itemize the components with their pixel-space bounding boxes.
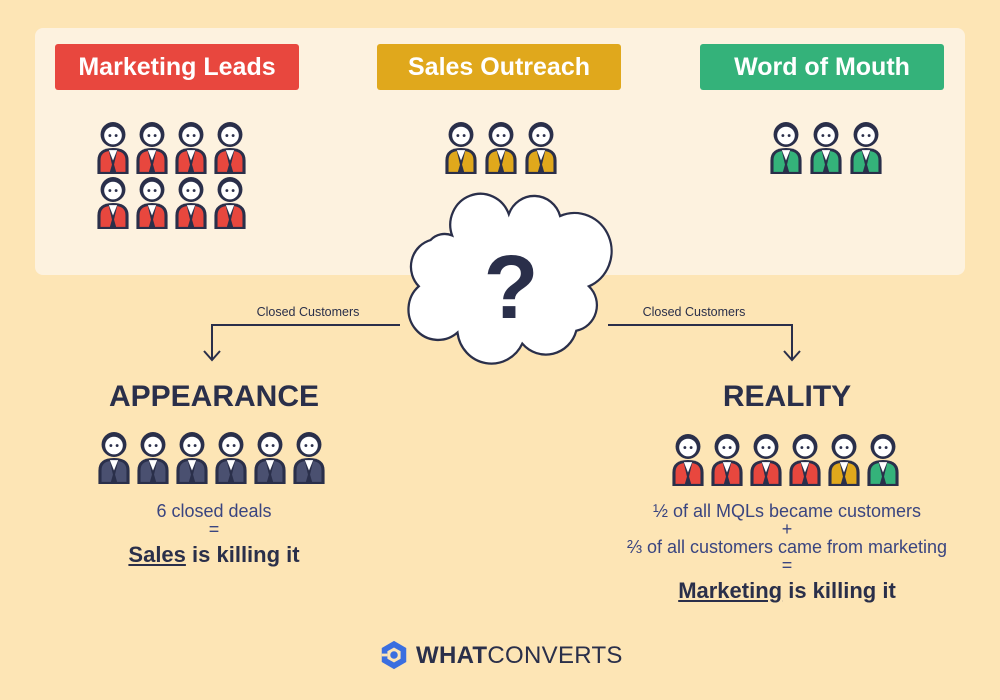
heading: Marketing Leads: Marketing Leads bbox=[78, 53, 276, 81]
text: reality conclusion: = bbox=[782, 555, 792, 575]
heading: Sales Outreach bbox=[377, 44, 621, 90]
heading: Sales Outreach: Sales Outreach bbox=[408, 53, 590, 81]
arrow: right bbox=[608, 325, 800, 360]
heading: Word of Mouth bbox=[700, 44, 944, 90]
heading: Word of Mouth: Word of Mouth bbox=[734, 53, 910, 81]
text: appearance conclusion: = bbox=[209, 519, 219, 539]
label: closed customers left: Closed Customers bbox=[257, 305, 359, 319]
panel: sources bbox=[35, 28, 965, 275]
icons: reality people bbox=[672, 434, 899, 486]
text: reality conclusion: ⅔ of all customers came from marketing bbox=[627, 537, 947, 557]
logo: WhatConverts: WHATCONVERTS bbox=[416, 642, 623, 669]
text: reality conclusion: Marketing is killing it bbox=[678, 578, 896, 603]
text: reality conclusion bbox=[627, 501, 947, 603]
text: reality conclusion: ½ of all MQLs became customers bbox=[653, 501, 921, 521]
icons: marketing people bbox=[97, 122, 246, 229]
text: appearance conclusion: Sales is killing it bbox=[128, 542, 300, 567]
text: appearance conclusion: 6 closed deals bbox=[156, 501, 272, 521]
heading: REALITY: REALITY bbox=[723, 380, 851, 413]
text: reality conclusion: + bbox=[782, 519, 792, 539]
icon: cloud with question mark: ? bbox=[484, 238, 538, 338]
label: closed customers right: Closed Customers bbox=[643, 305, 745, 319]
arrow: left bbox=[204, 325, 400, 360]
text: appearance conclusion bbox=[128, 501, 300, 567]
icons: sales people bbox=[445, 122, 557, 174]
heading: APPEARANCE: APPEARANCE bbox=[109, 380, 319, 413]
icons: appearance people bbox=[98, 432, 325, 484]
icon: cloud with question mark bbox=[408, 194, 612, 364]
heading: Marketing Leads bbox=[55, 44, 299, 90]
icons: word of mouth people bbox=[770, 122, 882, 174]
